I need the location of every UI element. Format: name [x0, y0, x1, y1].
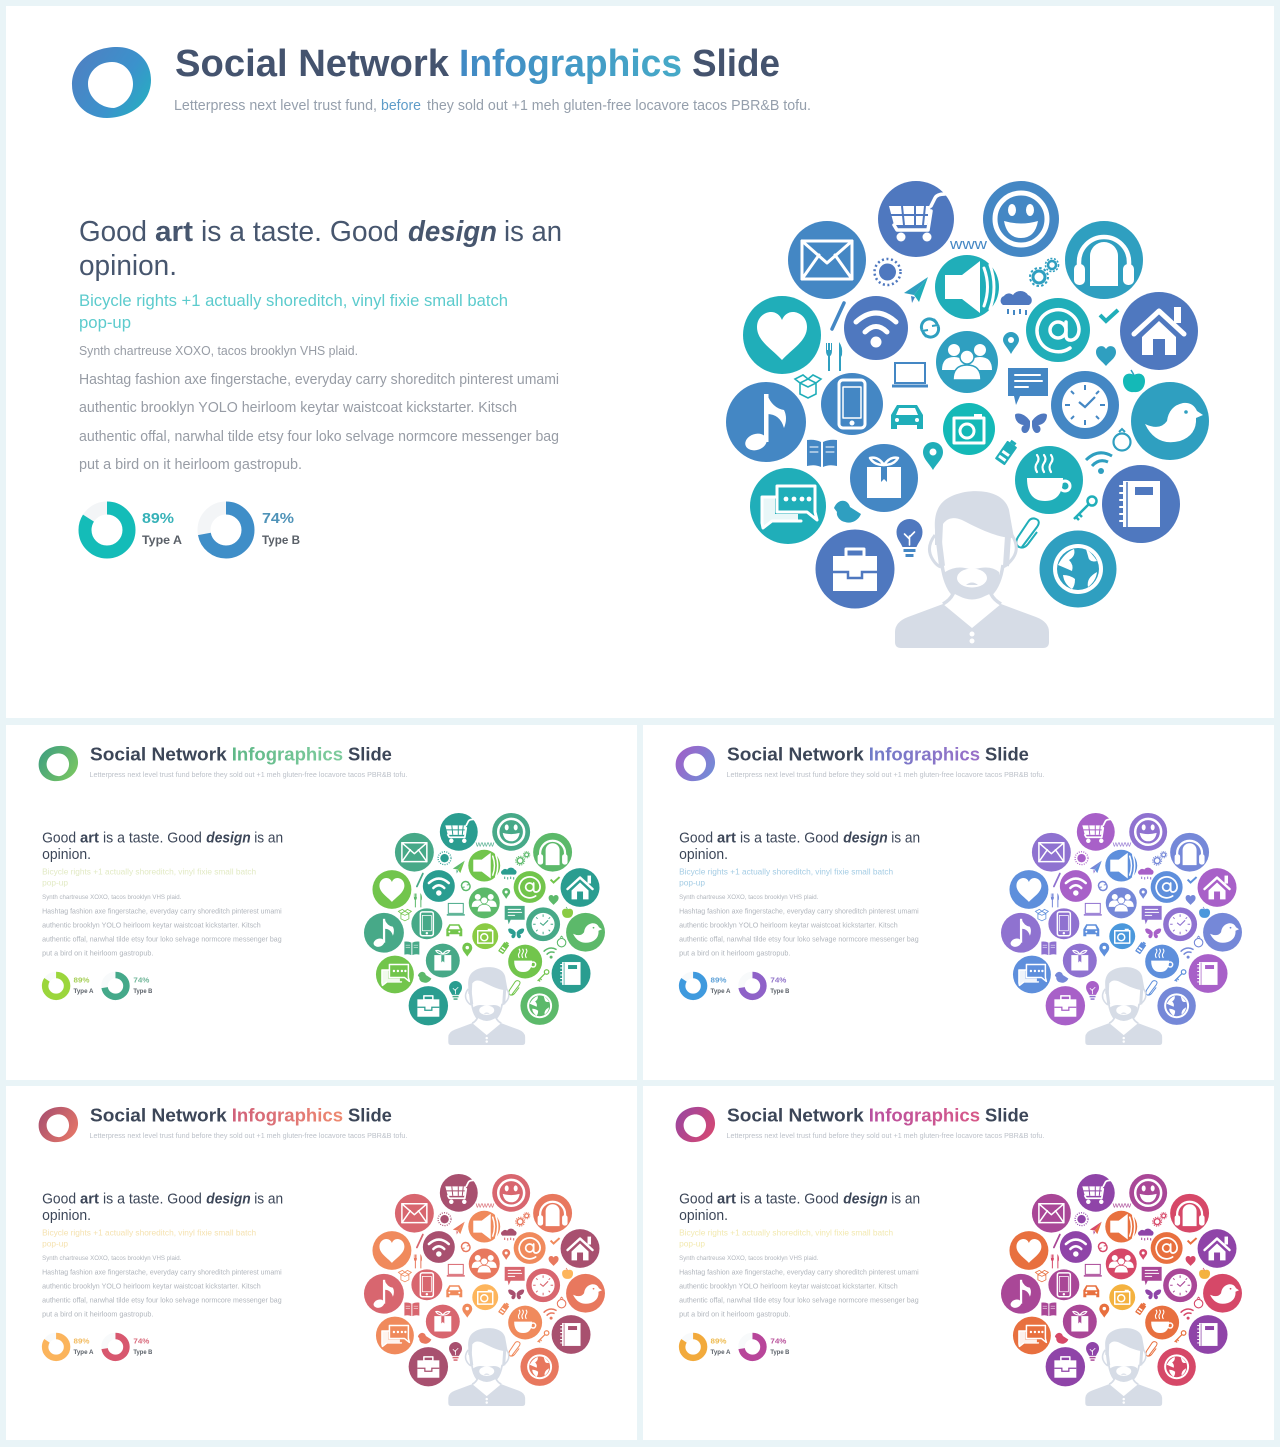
heading: design: [206, 1191, 251, 1207]
logo ring: [39, 746, 78, 781]
icon: ring: [1114, 429, 1130, 450]
donut chart: Type A 89%: Type A: [711, 1350, 731, 1356]
title: [175, 43, 780, 85]
donut chart: Type A 89%: Type A: [711, 989, 731, 995]
title: Slide: [985, 744, 1029, 765]
icon: smartphone: [821, 373, 883, 435]
title: Infographics: [869, 1105, 980, 1126]
donut chart: Type B 74%: [741, 975, 790, 997]
icon: heart: [743, 296, 821, 374]
subtitle: Letterpress next level trust fund before they sold out +1 meh gluten-free locavore tacos PBR&B tofu.: [727, 770, 1044, 779]
icon: open box: [795, 375, 821, 398]
heading: is a taste. Good: [740, 1191, 839, 1207]
heading: is an: [891, 1191, 920, 1207]
body text: authentic brooklyn YOLO heirloom keytar waistcoat kickstarter. Kitsch: [679, 920, 898, 929]
body text: Synth chartreuse XOXO, tacos brooklyn VHS plaid.: [42, 1255, 182, 1262]
body text: Synth chartreuse XOXO, tacos brooklyn VHS plaid.: [79, 344, 358, 358]
heading: Good: [679, 830, 713, 846]
donut chart: Type B 74%: 74%: [133, 975, 150, 984]
title: Slide: [348, 744, 392, 765]
heading: is a taste. Good: [103, 1191, 202, 1207]
heading: Good: [42, 1191, 76, 1207]
lead text: [42, 867, 256, 888]
donut chart: Type B 74%: Type B: [770, 1350, 790, 1356]
body text: [79, 344, 559, 473]
illustration: purple social network icon cloud: [1001, 813, 1242, 1045]
scaled slide content: [676, 1105, 1242, 1406]
logo ring: [676, 1107, 715, 1142]
donut chart: Type B 74%: Type B: [770, 989, 790, 995]
heading: [42, 830, 283, 863]
www label: www: [475, 1201, 495, 1210]
donut chart: Type B 74%: Type B: [133, 1350, 153, 1356]
icon: fork and knife: [826, 342, 842, 371]
heading: [679, 830, 920, 863]
heading: art: [80, 830, 99, 846]
title: Infographics: [869, 744, 980, 765]
icon: open book: [807, 440, 837, 467]
title: Infographics: [232, 1105, 343, 1126]
icon: globe: [1040, 530, 1116, 608]
icon: people group: [936, 331, 998, 393]
donut chart: Type A 89%: [682, 975, 731, 997]
icon: key: [1074, 496, 1096, 520]
body text: Synth chartreuse XOXO, tacos brooklyn VHS plaid.: [679, 1255, 819, 1262]
icon: paperclip: [1016, 518, 1039, 548]
title: [90, 744, 392, 765]
donut chart: Type B 74%: [204, 508, 300, 552]
lead text: Bicycle rights +1 actually shoreditch, vinyl fixie small batch: [679, 1228, 893, 1238]
icon: paper plane: [904, 277, 928, 303]
title: Infographics: [459, 43, 682, 85]
icon: notebook: [1102, 465, 1180, 543]
illustration: green social network icon cloud: [364, 813, 605, 1045]
icon: light bulb: [896, 519, 922, 557]
body text: [42, 894, 282, 958]
donut chart: Type A 89%: 89%: [74, 1336, 90, 1345]
panel: green slide: [6, 725, 637, 1080]
icon: sun: [874, 259, 900, 285]
donut chart: Type A 89%: [682, 1336, 731, 1358]
body text: authentic brooklyn YOLO heirloom keytar waistcoat kickstarter. Kitsch: [679, 1281, 898, 1290]
heading: is an: [254, 1191, 283, 1207]
donut chart: Type A 89%: 89%: [142, 510, 174, 527]
logo ring: [39, 1107, 78, 1142]
body text: put a bird on it heirloom gastropub.: [42, 949, 153, 958]
heading: art: [80, 1191, 99, 1207]
donut chart: Type A 89%: [45, 975, 94, 997]
donut chart: Type B 74%: Type B: [262, 533, 300, 547]
heading: design: [206, 830, 251, 846]
lead text: pop-up: [42, 878, 68, 888]
title: Social Network: [175, 43, 450, 85]
heading: [42, 1191, 283, 1224]
body text: authentic offal, narwhal tilde etsy four loko selvage normcore messenger bag: [42, 935, 282, 944]
title: Slide: [348, 1105, 392, 1126]
icon: apple: [1123, 370, 1145, 392]
www label: www: [475, 840, 495, 849]
title: [727, 1105, 1029, 1126]
heading: is an: [891, 830, 920, 846]
scaled slide content: [39, 744, 605, 1045]
heading: opinion.: [79, 250, 177, 282]
icon: car: [891, 405, 923, 429]
title: [727, 744, 1029, 765]
lead text: [42, 1228, 256, 1249]
icon: butterfly: [1015, 413, 1047, 433]
subtitle: before: [381, 98, 421, 114]
heading: opinion.: [679, 1208, 728, 1224]
donut chart: Type B 74%: [104, 975, 153, 997]
scaled slide content: [39, 1105, 605, 1406]
icon: wifi: [844, 296, 908, 360]
donut chart: Type B 74%: Type B: [133, 989, 153, 995]
icon: twitter bird: [1131, 382, 1209, 460]
icon: small bird: [834, 501, 861, 523]
icon: speech bubble: [1008, 368, 1048, 405]
icon: pencil: [832, 303, 844, 329]
body text: authentic brooklyn YOLO heirloom keytar waistcoat kickstarter. Kitsch: [79, 400, 517, 416]
heading: [679, 1191, 920, 1224]
icon: battery: [995, 438, 1019, 465]
www label: www: [949, 236, 987, 253]
icon: laptop: [892, 363, 928, 386]
icon: location pin: [1003, 332, 1019, 354]
icon: coffee cup: [1015, 446, 1083, 514]
donut chart: Type B 74%: 74%: [770, 1336, 787, 1345]
lead text: Bicycle rights +1 actually shoreditch, vinyl fixie small batch: [42, 1228, 256, 1238]
heading: is a taste. Good: [103, 830, 202, 846]
body text: Hashtag fashion axe fingerstache, everyday carry shoreditch pinterest umami: [679, 1267, 919, 1276]
illustration: social network icon cloud: [726, 181, 1209, 648]
lead text: pop-up: [42, 1239, 68, 1249]
panel: magenta slide: [643, 1086, 1274, 1440]
title: Infographics: [232, 744, 343, 765]
logo ring: [72, 47, 151, 118]
heading: Good: [79, 216, 147, 248]
title: Social Network: [727, 744, 864, 765]
icon: gift box: [850, 444, 918, 512]
icon: at sign: [1026, 298, 1090, 362]
body text: authentic offal, narwhal tilde etsy four loko selvage normcore messenger bag: [79, 429, 559, 445]
icon: camera: [943, 403, 995, 455]
donut chart: Type B 74%: [104, 1336, 153, 1358]
body text: Hashtag fashion axe fingerstache, everyday carry shoreditch pinterest umami: [679, 906, 919, 915]
lead text: [79, 291, 508, 332]
icon: briefcase: [816, 530, 894, 608]
heading: art: [155, 216, 193, 248]
lead text: [679, 867, 893, 888]
lead text: Bicycle rights +1 actually shoreditch, vinyl fixie small batch: [79, 291, 508, 310]
icon: smiley: [983, 181, 1059, 257]
icon: music note: [726, 382, 806, 462]
donut chart: Type B 74%: 74%: [133, 1336, 150, 1345]
title: Social Network: [90, 1105, 227, 1126]
icon: house: [1120, 292, 1198, 370]
donut chart: Type B 74%: 74%: [770, 975, 787, 984]
body text: put a bird on it heirloom gastropub.: [679, 949, 790, 958]
icon: gears: [1030, 258, 1058, 286]
icon: person with beard: [895, 491, 1049, 648]
body text: authentic offal, narwhal tilde etsy four loko selvage normcore messenger bag: [679, 935, 919, 944]
panel: coral slide: [6, 1086, 637, 1440]
heading: design: [408, 216, 497, 248]
lead text: pop-up: [79, 313, 131, 332]
body text: authentic brooklyn YOLO heirloom keytar waistcoat kickstarter. Kitsch: [42, 1281, 261, 1290]
heading: is an: [504, 216, 562, 248]
body text: Hashtag fashion axe fingerstache, everyday carry shoreditch pinterest umami: [42, 1267, 282, 1276]
logo ring: [676, 746, 715, 781]
subtitle: Letterpress next level trust fund before they sold out +1 meh gluten-free locavore tacos PBR&B tofu.: [90, 1131, 407, 1140]
illustration: magenta social network icon cloud: [1001, 1174, 1242, 1406]
icon: chat bubbles: [750, 468, 826, 544]
icon: headphones: [1065, 221, 1143, 299]
donut chart: Type B 74%: [741, 1336, 790, 1358]
heading: is a taste. Good: [201, 216, 399, 248]
body text: [42, 1255, 282, 1319]
donut chart: Type A 89%: 89%: [74, 975, 90, 984]
lead text: pop-up: [679, 1239, 705, 1249]
donut chart: Type B 74%: 74%: [262, 510, 294, 527]
body text: put a bird on it heirloom gastropub.: [79, 457, 302, 473]
heading: Good: [42, 830, 76, 846]
www label: www: [1112, 840, 1132, 849]
body text: [679, 1255, 919, 1319]
icon: rain cloud: [1001, 291, 1032, 315]
icon: speaker: [935, 255, 999, 319]
body text: authentic brooklyn YOLO heirloom keytar waistcoat kickstarter. Kitsch: [42, 920, 261, 929]
www label: www: [1112, 1201, 1132, 1210]
title: Social Network: [90, 744, 227, 765]
donut chart: Type A 89%: Type A: [74, 989, 94, 995]
icon: map pin: [923, 442, 943, 470]
icon: shopping cart: [878, 181, 954, 257]
lead text: [679, 1228, 893, 1249]
title: Slide: [692, 43, 780, 85]
scaled slide content: [676, 744, 1242, 1045]
heading: opinion.: [42, 1208, 91, 1224]
icon: small heart: [1096, 346, 1116, 366]
heading: opinion.: [42, 847, 91, 863]
icon: envelope: [788, 221, 866, 299]
donut chart: Type A 89%: 89%: [711, 975, 727, 984]
heading: [79, 216, 562, 282]
donut chart: Type A 89%: [85, 508, 182, 552]
lead text: Bicycle rights +1 actually shoreditch, vinyl fixie small batch: [42, 867, 256, 877]
heading: is a taste. Good: [740, 830, 839, 846]
icon: refresh arrows: [921, 319, 939, 337]
body text: put a bird on it heirloom gastropub.: [679, 1310, 790, 1319]
subtitle: Letterpress next level trust fund before they sold out +1 meh gluten-free locavore tacos PBR&B tofu.: [90, 770, 407, 779]
title: Slide: [985, 1105, 1029, 1126]
heading: design: [843, 1191, 888, 1207]
body text: Synth chartreuse XOXO, tacos brooklyn VHS plaid.: [42, 894, 182, 901]
body text: authentic offal, narwhal tilde etsy four loko selvage normcore messenger bag: [42, 1296, 282, 1305]
subtitle: they sold out +1 meh gluten-free locavore tacos PBR&B tofu.: [427, 98, 811, 114]
heading: art: [717, 830, 736, 846]
heading: is an: [254, 830, 283, 846]
heading: art: [717, 1191, 736, 1207]
body text: put a bird on it heirloom gastropub.: [42, 1310, 153, 1319]
lead text: Bicycle rights +1 actually shoreditch, vinyl fixie small batch: [679, 867, 893, 877]
heading: design: [843, 830, 888, 846]
subtitle: Letterpress next level trust fund,: [174, 98, 377, 114]
body text: Hashtag fashion axe fingerstache, everyday carry shoreditch pinterest umami: [42, 906, 282, 915]
title: [90, 1105, 392, 1126]
icon: check mark: [1100, 310, 1118, 321]
panel: purple slide: [643, 725, 1274, 1080]
subtitle: Letterpress next level trust fund before they sold out +1 meh gluten-free locavore tacos PBR&B tofu.: [727, 1131, 1044, 1140]
icon: clock: [1051, 371, 1119, 439]
heading: Good: [679, 1191, 713, 1207]
donut chart: Type A 89%: Type A: [142, 533, 182, 547]
illustration: coral social network icon cloud: [364, 1174, 605, 1406]
body text: [679, 894, 919, 958]
lead text: pop-up: [679, 878, 705, 888]
panel: main blue slide: [6, 6, 1274, 718]
icon: small wifi: [1086, 453, 1112, 474]
donut chart: Type A 89%: Type A: [74, 1350, 94, 1356]
donut chart: Type A 89%: 89%: [711, 1336, 727, 1345]
heading: opinion.: [679, 847, 728, 863]
body text: authentic offal, narwhal tilde etsy four loko selvage normcore messenger bag: [679, 1296, 919, 1305]
body text: Synth chartreuse XOXO, tacos brooklyn VHS plaid.: [679, 894, 819, 901]
donut chart: Type A 89%: [45, 1336, 94, 1358]
body text: Hashtag fashion axe fingerstache, everyday carry shoreditch pinterest umami: [79, 372, 559, 388]
title: Social Network: [727, 1105, 864, 1126]
subtitle: [174, 98, 811, 114]
